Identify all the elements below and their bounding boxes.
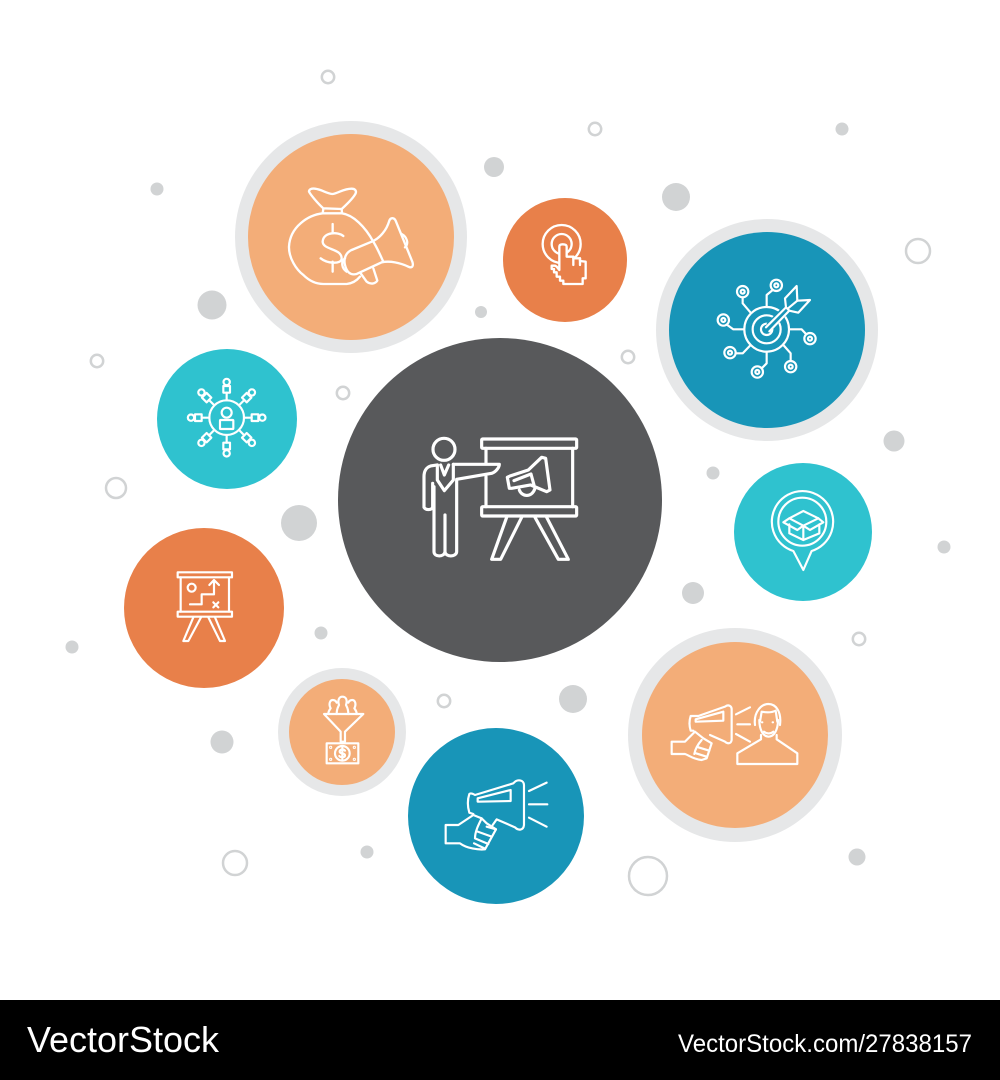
icon: pointer click: [543, 225, 586, 284]
panel: target bubble: [656, 219, 878, 441]
footer image id text: VectorStock.com/27838157: [678, 1030, 972, 1058]
icon: target with arrow: [718, 280, 816, 378]
panel: money bag bubble: [235, 121, 467, 353]
scattered grey dots: [66, 122, 950, 866]
footer bar: [0, 1000, 1000, 1080]
panel: central presenter bubble: [338, 338, 662, 662]
panel: hand megaphone bubble: [408, 728, 584, 904]
panel: strategy chart bubble: [124, 528, 284, 688]
panel: speaking to person bubble: [628, 628, 842, 842]
icon: strategy board: [178, 572, 232, 641]
icon: box location pin: [772, 491, 833, 570]
panel: network bubble: [157, 349, 297, 489]
panel: location box bubble: [734, 463, 872, 601]
icon: megaphone aimed at person: [672, 704, 797, 764]
icon: money bag with megaphone: [289, 189, 413, 284]
icon: funnel with people and money: [324, 697, 363, 763]
icon: hand holding megaphone: [446, 780, 547, 849]
icon: presenter with board: [424, 438, 577, 559]
footer logo text: VectorStock: [27, 1019, 220, 1060]
icon: people network: [188, 379, 265, 456]
scattered grey rings: [91, 71, 930, 895]
panel: funnel bubble: [278, 668, 406, 796]
panel: click bubble: [503, 198, 627, 322]
